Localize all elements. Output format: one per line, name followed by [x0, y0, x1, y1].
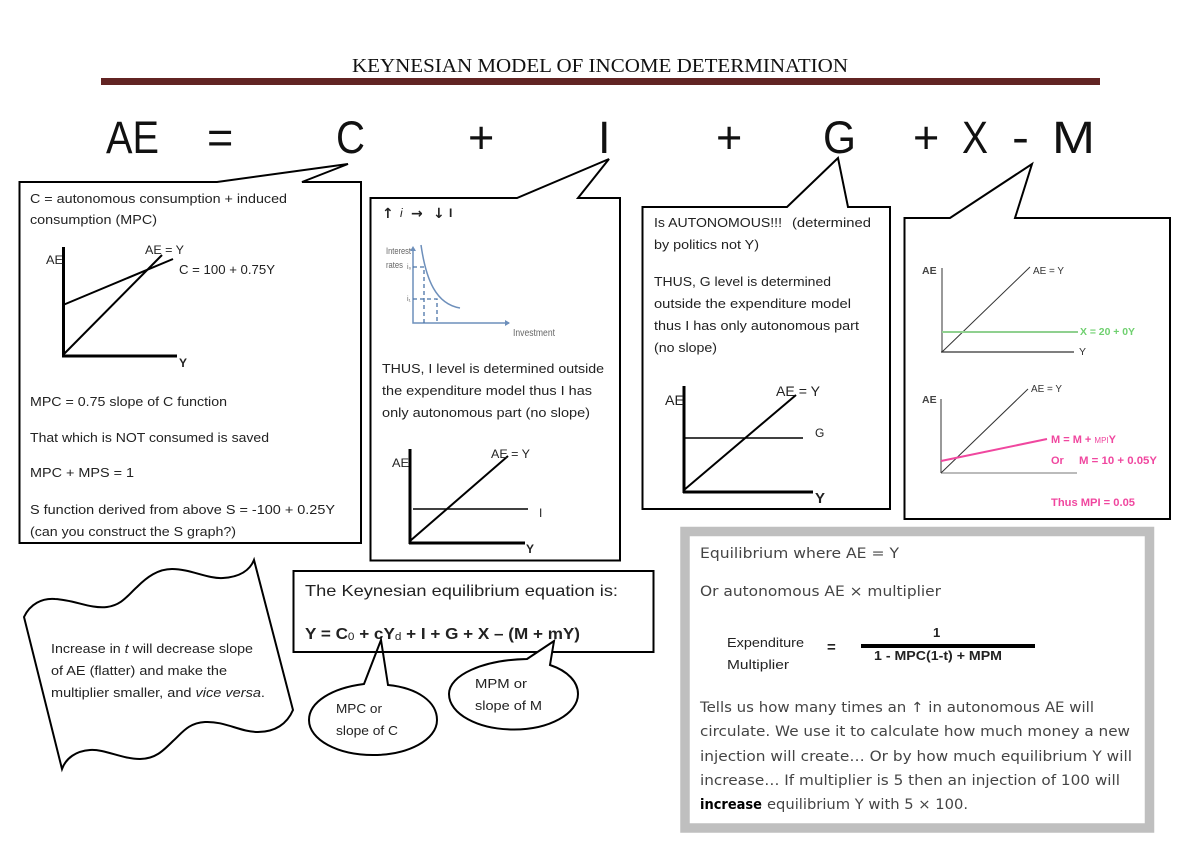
text: tax effect — [51, 641, 265, 700]
callout: MPM: MPM or — [475, 676, 528, 691]
text: I level — [382, 361, 604, 420]
text: multiplier explanation: increase… If multiplier is 5 then an injection of 100 will — [700, 773, 1120, 789]
main equation: + — [468, 112, 494, 163]
text: MPC notes — [30, 394, 335, 539]
callout box: I — [370, 159, 620, 560]
chart: imports: M = 10 + 0.05Y — [1079, 455, 1158, 467]
panel: Keynesian equilibrium equation: The Keynesian equilibrium equation is: — [305, 583, 618, 600]
text: tax effect: Increase in t will decrease slope — [51, 641, 253, 656]
main equation: AE — [106, 112, 159, 163]
title: KEYNESIAN MODEL OF INCOME DETERMINATION — [352, 55, 848, 77]
main equation: = — [207, 112, 233, 163]
text: multiplier explanation: circulate. We use it to calculate how much money a new — [700, 724, 1130, 740]
text: G notes: thus I has only autonomous part — [654, 318, 859, 333]
callout: MPM — [449, 641, 578, 730]
chart: consumption function: AE = Y — [145, 243, 184, 257]
text: interest relation: → — [411, 206, 423, 222]
text: G notes: (determined — [792, 215, 871, 230]
chart: exports: AE = Y — [1033, 265, 1064, 277]
text: interest relation: ↑ — [382, 206, 394, 222]
panel: equilibrium and multiplier — [685, 532, 1150, 828]
formula: expenditure multiplier: = — [827, 639, 836, 656]
text: G notes — [654, 215, 871, 355]
formula: expenditure multiplier — [727, 625, 1035, 672]
formula: expenditure multiplier: Expenditure — [727, 635, 804, 650]
chart: consumption function — [46, 243, 275, 370]
text: interest relation: I — [449, 206, 452, 220]
main equation — [106, 112, 1095, 163]
panel: Keynesian equilibrium equation: 0 — [348, 631, 354, 643]
text: G notes: THUS, G level is determined — [654, 274, 831, 289]
text: G notes: (no slope) — [654, 340, 717, 355]
panel: Keynesian equilibrium equation: d — [395, 631, 401, 643]
panel: government — [642, 158, 890, 509]
text: equilibrium — [700, 546, 941, 600]
chart: imports: Thus MPI = 0.05 — [1051, 497, 1135, 509]
wave shape — [24, 560, 293, 769]
main equation: + — [716, 112, 742, 163]
text: C definition: C = autonomous consumption + induced — [30, 191, 287, 206]
main equation: + — [913, 112, 939, 163]
main equation: M — [1052, 112, 1095, 163]
main equation: C — [336, 112, 365, 163]
text: multiplier explanation: injection will create… Or by how much equilibrium Y will — [700, 749, 1132, 765]
callout box: G — [642, 158, 890, 509]
main equation: X — [962, 112, 988, 163]
panel: Keynesian equilibrium equation: Y = C — [305, 626, 345, 643]
text: MPC notes: That which is NOT consumed is saved — [30, 430, 269, 445]
panel: investment — [370, 159, 620, 560]
text: G notes: Is AUTONOMOUS!!! — [654, 215, 782, 230]
chart: investment level: I — [539, 506, 542, 520]
callout: MPC: slope of C — [336, 723, 398, 738]
text: interest relation — [382, 206, 452, 222]
chart: investment curve: rates — [386, 260, 403, 270]
text: tax effect: of AE (flatter) and make the — [51, 663, 227, 678]
chart: investment curve: Interest — [386, 246, 411, 256]
chart: investment level: Y — [526, 542, 534, 556]
main equation: - — [1012, 112, 1029, 163]
chart: imports: M = M + MPIY — [1051, 434, 1117, 446]
text: MPC notes: S function derived from above S = -100 + 0.25Y — [30, 502, 335, 517]
chart: investment curve — [386, 245, 555, 339]
chart: government level: Y — [815, 490, 825, 507]
panel: wave note on tax — [24, 560, 293, 769]
main equation: I — [598, 112, 611, 163]
panel: Keynesian equilibrium equation: + I + G + X – (M + mY) — [401, 626, 580, 643]
chart: government level: AE = Y — [776, 383, 821, 399]
callout: MPC — [309, 640, 437, 755]
chart: exports: X = 20 + 0Y — [1080, 326, 1135, 338]
text: MPC notes: MPC = 0.75 slope of C function — [30, 394, 227, 409]
panel: Keynesian equilibrium equation: + cY — [354, 626, 395, 643]
chart: investment level: AE = Y — [491, 447, 530, 461]
chart: consumption function: C = 100 + 0.75Y — [179, 262, 275, 277]
formula: expenditure multiplier: Multiplier — [727, 657, 790, 672]
text: multiplier explanation: increase — [700, 797, 762, 813]
text: equilibrium: Or autonomous AE × multiplier — [700, 584, 941, 600]
text: interest relation: i — [400, 206, 403, 220]
title rule — [101, 78, 1100, 85]
text: G notes: by politics not Y) — [654, 237, 759, 252]
formula: expenditure multiplier: 1 — [933, 625, 940, 640]
formula: expenditure multiplier: 1 - MPC(1-t) + MPM — [874, 648, 1002, 663]
frame — [685, 532, 1150, 828]
chart: government level — [665, 383, 825, 507]
main equation: G — [823, 112, 856, 163]
chart: consumption function: AE — [46, 253, 63, 267]
chart: consumption function: Y — [179, 356, 187, 370]
text: I level: only autonomous part (no slope) — [382, 405, 590, 420]
chart: imports — [922, 383, 1158, 509]
chart: exports: AE — [922, 265, 937, 277]
text: tax effect: multiplier smaller, and vice versa . — [51, 685, 265, 700]
chart: government level: G — [815, 426, 824, 440]
text: equilibrium: Equilibrium where AE = Y — [700, 546, 899, 562]
chart: imports: AE = Y — [1031, 383, 1062, 395]
panel: Keynesian equilibrium equation — [294, 571, 654, 652]
chart: exports: Y — [1079, 346, 1086, 358]
text: I level: THUS, I level is determined outside — [382, 361, 604, 376]
text: multiplier explanation: equilibrium Y with 5 × 100. — [767, 797, 968, 813]
callout: MPM: slope of M — [475, 698, 542, 713]
panel: exports and imports — [904, 164, 1170, 519]
chart: exports — [922, 265, 1135, 358]
chart: investment curve: i₀ — [407, 264, 412, 271]
text: multiplier explanation: Tells us how many times an ↑ in autonomous AE will — [699, 700, 1094, 716]
chart: government level: AE — [665, 392, 684, 408]
text: MPC notes: MPC + MPS = 1 — [30, 465, 134, 480]
chart: investment level: AE — [392, 456, 409, 470]
text: multiplier explanation — [699, 700, 1132, 813]
callout box: C — [20, 164, 361, 543]
text: G notes: outside the expenditure model — [654, 296, 851, 311]
text: interest relation: ↓ — [433, 206, 445, 222]
chart: imports: Or — [1051, 455, 1065, 467]
chart: investment level — [392, 447, 542, 556]
chart: investment curve: i₁ — [407, 296, 412, 303]
chart: imports: AE — [922, 394, 937, 406]
text: C definition — [30, 191, 287, 227]
callout: MPC: MPC or — [336, 701, 383, 716]
text: C definition: consumption (MPC) — [30, 212, 157, 227]
chart: investment curve: Investment — [513, 328, 555, 339]
panel: consumption — [20, 164, 361, 543]
text: MPC notes: (can you construct the S graph?) — [30, 524, 236, 539]
text: I level: the expenditure model thus I has — [382, 383, 593, 398]
callout box: X and M — [904, 164, 1170, 519]
